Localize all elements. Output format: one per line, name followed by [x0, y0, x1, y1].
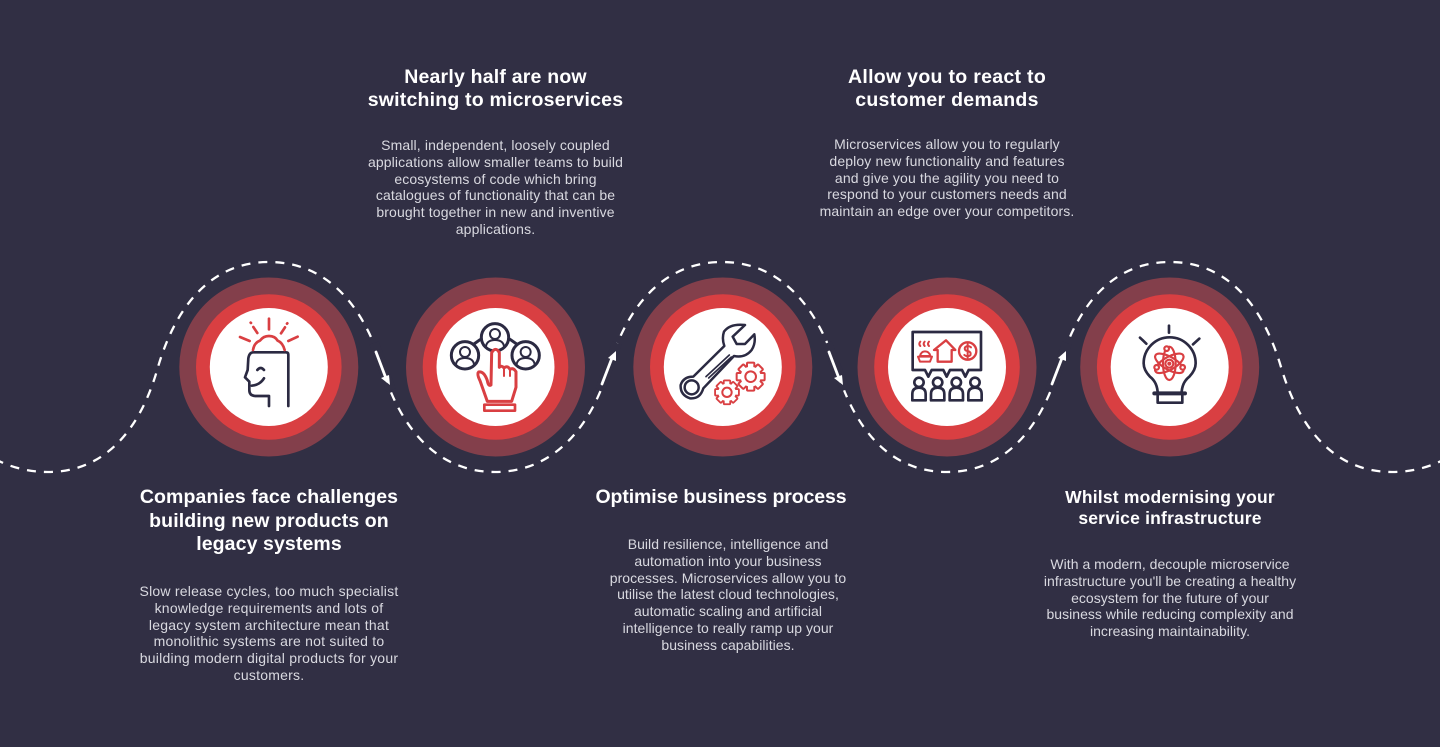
text: step 1: building modern digital products for your [140, 650, 398, 666]
icon: hand selecting people [451, 324, 539, 411]
step 2 badge [406, 278, 585, 456]
heading: step 2: switching to microservices [368, 89, 623, 111]
text: step 2: applications allow smaller teams to build [368, 154, 623, 170]
heading: step 2 [368, 66, 623, 111]
text: step 3: automation into your business [634, 553, 822, 569]
arrow 4 [1052, 351, 1066, 384]
text: step 4: respond to your customers needs and [827, 186, 1067, 202]
icon: head with brain [240, 319, 298, 406]
text: step 2: brought together in new and inventive [376, 204, 615, 220]
text: step 2 [368, 137, 623, 237]
dashed wave path [0, 262, 1440, 472]
text: step 5: ecosystem for the future of your [1071, 590, 1269, 606]
step 4 badge [858, 278, 1036, 456]
text: step 1: Slow release cycles, too much specialist [140, 583, 398, 599]
step 1 badge [179, 278, 358, 456]
heading: step 4: Allow you to react to [848, 66, 1046, 88]
heading: step 1: building new products on [149, 510, 389, 532]
step 5 badge [1080, 278, 1259, 456]
text: step 1: legacy system architecture mean that [149, 616, 389, 632]
text: step 5: increasing maintainability. [1090, 623, 1250, 639]
heading: step 5: Whilst modernising your [1065, 487, 1275, 507]
heading: step 4 [848, 66, 1046, 111]
text: step 4: deploy new functionality and features [829, 153, 1065, 169]
text: step 4: maintain an edge over your competitors. [820, 203, 1074, 219]
text: step 3: business capabilities. [661, 636, 795, 652]
text: step 1: monolithic systems are not suited to [154, 633, 384, 649]
heading: step 1 [140, 486, 398, 555]
text: step 1: customers. [234, 667, 304, 683]
arrow 2 [602, 351, 616, 384]
text: step 3: processes. Microservices allow you to [610, 570, 846, 586]
text: step 5 [1044, 556, 1296, 639]
text: step 2: applications. [456, 221, 535, 237]
text: step 3: utilise the latest cloud technologies, [617, 586, 839, 602]
text: step 2: catalogues of functionality that can be [376, 187, 615, 203]
text: step 3: intelligence to really ramp up your [623, 620, 833, 636]
arrow 3 [829, 352, 843, 385]
heading: step 2: Nearly half are now [404, 66, 587, 88]
text: step 4 [820, 136, 1074, 219]
heading: step 4: customer demands [855, 89, 1039, 111]
text: step 5: business while reducing complexity and [1046, 606, 1294, 622]
heading: step 1: legacy systems [196, 533, 342, 555]
text: step 5: infrastructure you'll be creating a healthy [1044, 573, 1296, 589]
text: step 1 [140, 583, 398, 683]
heading: step 1: Companies face challenges [140, 486, 398, 508]
heading: step 5: service infrastructure [1078, 508, 1262, 528]
text: step 3: automatic scaling and artificial [634, 603, 822, 619]
arrow 1 [376, 352, 390, 385]
icon: light bulb with atom [1140, 326, 1199, 403]
text: step 5: With a modern, decouple microservice [1050, 556, 1290, 572]
text: step 3 [610, 536, 846, 653]
text: step 2: Small, independent, loosely coupled [381, 137, 610, 153]
text: step 4: Microservices allow you to regularly [834, 136, 1060, 152]
text: step 4: and give you the agility you need to [835, 170, 1059, 186]
heading: step 5 [1065, 487, 1275, 528]
text: step 2: ecosystems of code which bring [394, 170, 597, 186]
step 3 badge [633, 278, 812, 456]
icon: audience and board [912, 332, 982, 400]
heading: step 3: Optimise business process [595, 486, 847, 508]
icon: wrench and gears [681, 325, 764, 403]
text: step 3: Build resilience, intelligence and [628, 536, 828, 552]
text: step 1: knowledge requirements and lots of [155, 600, 383, 616]
